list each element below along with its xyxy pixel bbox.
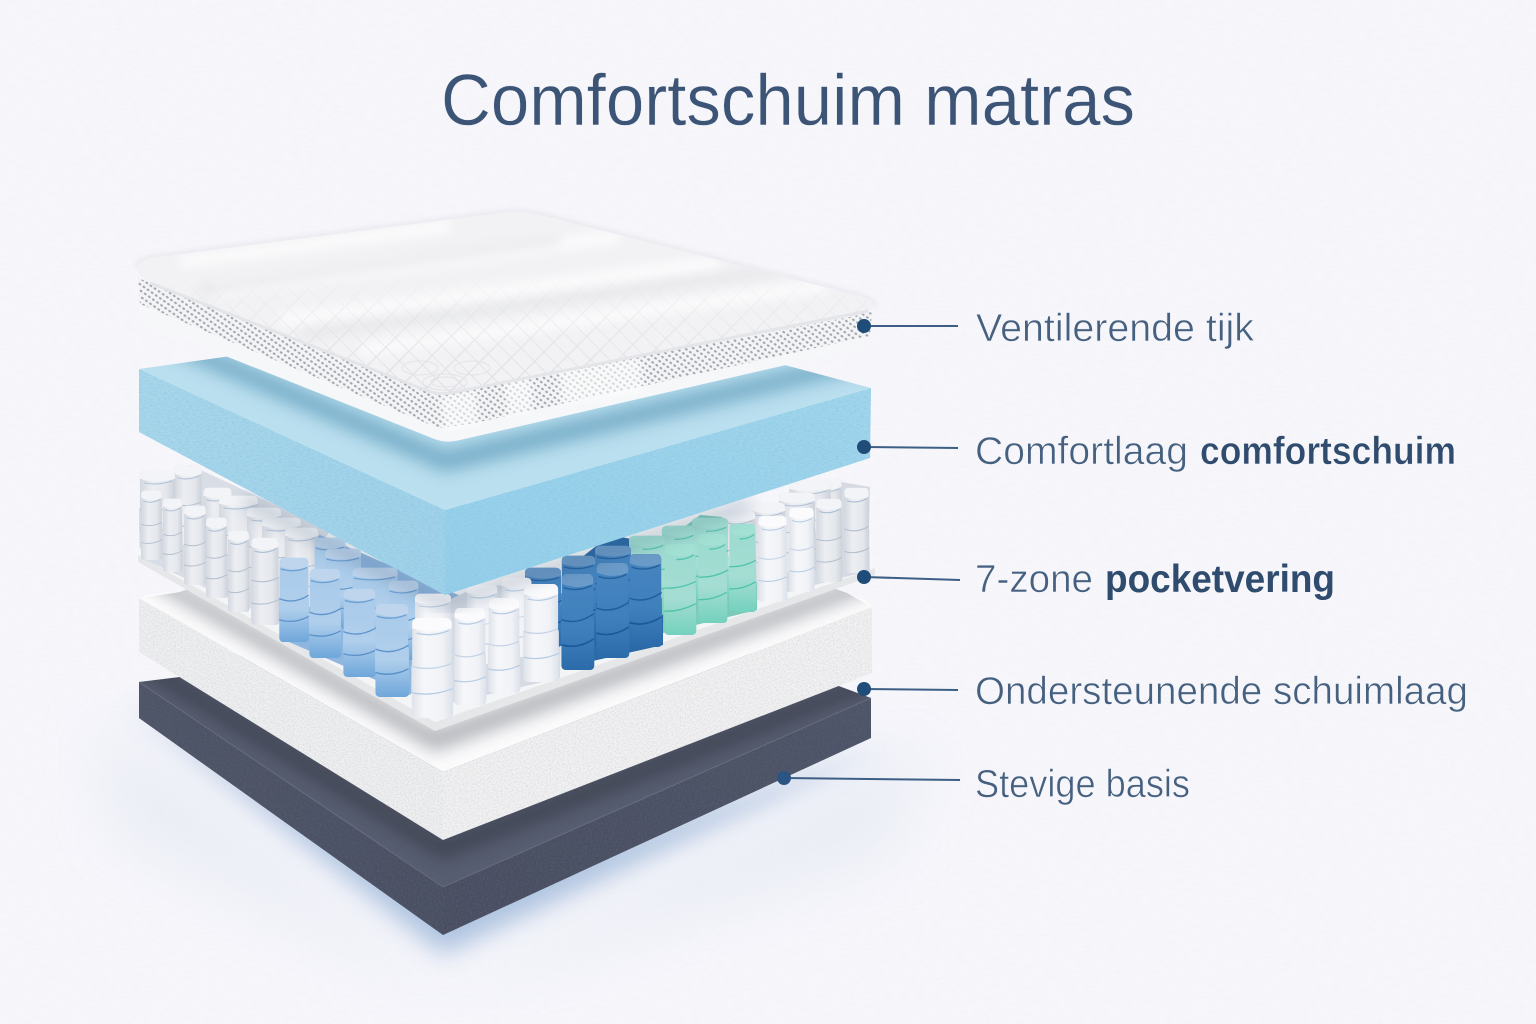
layer: comfortschuim [139, 356, 871, 595]
label: 7-zone pocketvering: 7-zone [975, 558, 1093, 601]
label: 7-zone pocketvering [975, 558, 1335, 601]
support foam right side [443, 607, 872, 840]
label: stevige basis: Stevige basis [975, 763, 1190, 806]
topper quilting [210, 278, 823, 392]
ground shadow [100, 700, 930, 990]
leader: ondersteunende schuimlaag [857, 682, 958, 696]
comfort foam right side [445, 388, 871, 595]
label: ventilerende tijk: Ventilerende tijk [976, 307, 1255, 350]
leader: comfortschuim [857, 440, 958, 454]
mesh highlights [440, 358, 642, 430]
leader: pocketvering [857, 570, 960, 584]
label: comfortlaag comfortschuim: Comfortlaag [975, 430, 1188, 473]
front springs: white zone right [758, 488, 869, 602]
comfort foam left side [139, 369, 445, 595]
topper top face [137, 212, 874, 392]
layer: ventilerende tijk [130, 200, 890, 442]
support foam top face [139, 470, 872, 772]
front springs: green zone [664, 524, 756, 635]
title: Comfortschuim matras [441, 61, 1135, 141]
label: comfortlaag comfortschuim [975, 430, 1456, 473]
front springs: light blue zone [279, 558, 409, 697]
spring mass backing [141, 465, 870, 712]
layer: ondersteunende schuimlaag [139, 589, 872, 840]
base top face [139, 560, 871, 887]
label: 7-zone pocketvering: pocketvering [1105, 558, 1335, 601]
label: ondersteunende schuimlaag: Ondersteunende schuimlaag [975, 670, 1468, 713]
topper bottom strip [138, 276, 874, 442]
back row springs [139, 466, 842, 673]
topper soft outline [137, 212, 874, 307]
comfort foam top face [139, 308, 871, 510]
label: comfortlaag comfortschuim: comfortschuim [1200, 430, 1456, 473]
front springs: dark blue zone [561, 554, 662, 670]
leader: ventilerende tijk [857, 319, 958, 333]
layer: stevige basis [138, 654, 872, 935]
leader: stevige basis [777, 771, 960, 785]
base left side [139, 682, 443, 935]
spring base pad [138, 430, 875, 731]
front springs: white zone centre [411, 584, 559, 718]
topper mesh side [138, 278, 872, 428]
front springs: white zone left [141, 491, 279, 625]
infographic: mattress layers [119, 72, 1466, 968]
support foam left side [139, 598, 443, 840]
layer: pocket springs [138, 430, 875, 731]
base right side [443, 698, 871, 935]
